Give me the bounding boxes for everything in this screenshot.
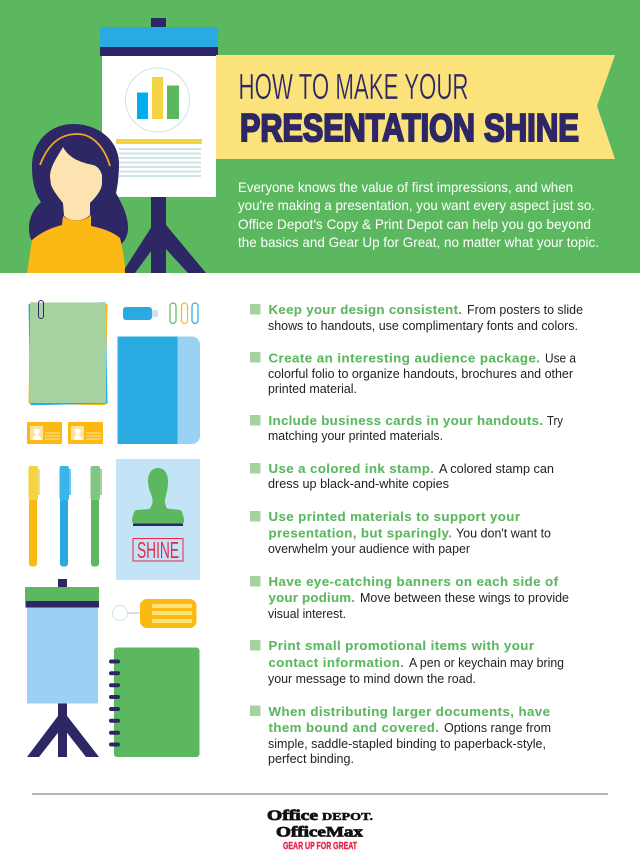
tip: printed materials: [250, 509, 551, 556]
tip: promotional items: A pen or keychain may bring: [409, 656, 564, 670]
title banner: [216, 55, 615, 159]
icon: banner stand: [25, 579, 99, 757]
stamp word: SHINE: [137, 537, 179, 563]
header panel: [0, 0, 640, 273]
intro paragraph: Everyone knows the value of first impressions, and when: [238, 179, 573, 195]
title line 1: HOW TO MAKE YOUR: [238, 66, 468, 107]
tip: ink stamp: Use a colored ink stamp.: [268, 461, 434, 476]
icon: business cards: [27, 422, 103, 444]
icon: folder: [118, 336, 200, 444]
tip: bound documents: simple, saddle-stapled binding to paperback-style,: [268, 737, 546, 751]
icon: stacked papers with clip: [28, 300, 108, 405]
logo: Office: [267, 808, 318, 824]
tip: banners: Have eye-catching banners on each side of: [268, 574, 559, 589]
intro paragraph: you're making a presentation, you want every aspect just so.: [238, 197, 595, 213]
tips list: [250, 302, 583, 766]
icon: paper clips: [170, 303, 198, 324]
tip: printed materials: presentation, but sparingly.: [268, 526, 452, 540]
tip: bound documents: When distributing larger documents, have: [268, 704, 550, 719]
tip: business cards: [250, 413, 564, 443]
tip: printed materials: overwhelm your audience with paper: [268, 542, 470, 556]
tip: banners: visual interest.: [268, 607, 346, 621]
tip: bound documents: perfect binding.: [268, 752, 354, 766]
tip: bound documents: [250, 704, 551, 766]
tip: audience package: Use a: [545, 352, 576, 366]
tip: banners: your podium.: [268, 590, 355, 605]
tip: audience package: [250, 350, 576, 396]
tip: design consistent: shows to handouts, use complimentary fonts and colors.: [268, 319, 578, 333]
tip: promotional items: your message to mind down the road.: [268, 672, 476, 686]
tip: ink stamp: [250, 461, 554, 491]
tip: audience package: colorful folio to organize handouts, brochures and other: [268, 367, 573, 381]
tip: banners: [250, 574, 569, 621]
tip: business cards: Try: [547, 414, 564, 428]
logo: DEPOT.: [322, 812, 373, 823]
tip: bound documents: Options range from: [444, 721, 551, 735]
icon: usb drive: [123, 307, 158, 320]
title line 2: PRESENTATION: [240, 107, 475, 150]
icon: presentation easel: [100, 18, 218, 273]
tip: audience package: Create an interesting audience package.: [268, 350, 540, 366]
tip: business cards: matching your printed materials.: [268, 429, 443, 443]
tip: printed materials: You don't want to: [456, 526, 551, 540]
intro paragraph: Office Depot's Copy & Print Depot can help you go beyond: [238, 216, 591, 232]
icon: woman presenter: [27, 124, 128, 273]
tip: promotional items: [250, 638, 564, 686]
tip: promotional items: contact information.: [268, 655, 404, 670]
icon: stamp panel: [116, 459, 200, 580]
tip: design consistent: From posters to slide: [467, 303, 583, 317]
tip: ink stamp: A colored stamp can: [439, 462, 554, 476]
title line 2: SHINE: [484, 107, 579, 150]
tip: promotional items: Print small promotional items with your: [268, 638, 534, 653]
icon: key tag: [112, 599, 196, 628]
tip: design consistent: Keep your design consistent.: [268, 302, 462, 317]
tip: printed materials: Use printed materials to support your: [268, 509, 520, 524]
logo: OfficeMax: [276, 824, 364, 840]
tip: ink stamp: dress up black-and-white copies: [268, 477, 449, 491]
logo: GEAR UP FOR GREAT: [283, 841, 357, 852]
icon: pens: [28, 466, 102, 566]
tip: design consistent: [250, 302, 583, 333]
logo: [267, 808, 373, 852]
intro paragraph: [238, 179, 599, 250]
tip: banners: Move between these wings to provide: [360, 591, 569, 605]
intro paragraph: the basics and Gear Up for Great, no matter what your topic.: [238, 234, 599, 250]
tip: business cards: Include business cards in your handouts.: [268, 413, 543, 428]
tip: audience package: printed material.: [268, 382, 357, 396]
tip: bound documents: them bound and covered.: [268, 720, 439, 735]
icon: spiral notebook: [111, 648, 200, 757]
